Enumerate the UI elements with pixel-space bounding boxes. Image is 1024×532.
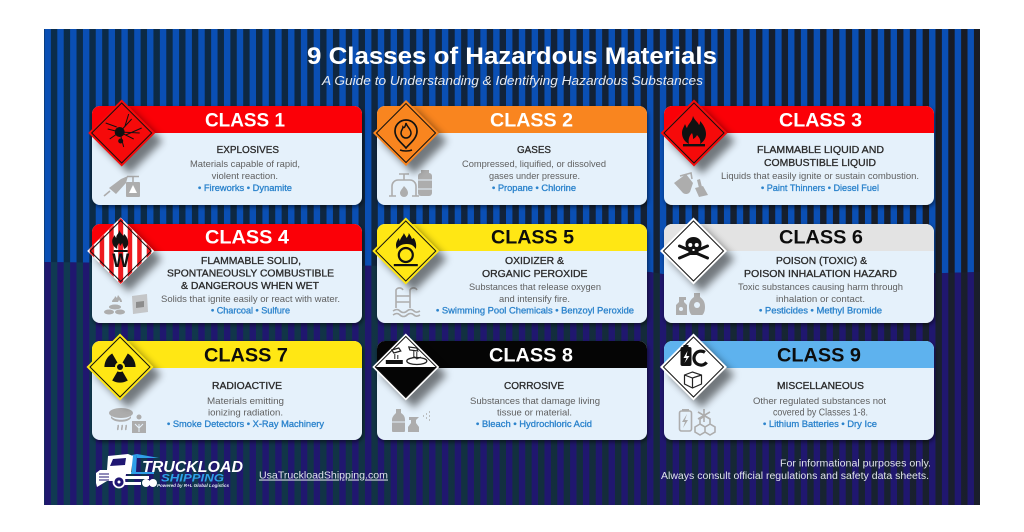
card body	[92, 341, 362, 440]
description: violent reaction.	[212, 170, 278, 181]
heading	[744, 256, 897, 280]
heading: GASES	[517, 145, 551, 156]
disclaimer	[661, 458, 931, 482]
icon: flammable solid placard: W	[112, 251, 129, 272]
icon: firework and dynamite	[104, 176, 140, 197]
description: Compressed, liquified, or dissolved	[462, 158, 606, 169]
card header	[377, 224, 647, 251]
title: 9 Classes of Hazardous Materials	[307, 43, 717, 70]
card header	[92, 224, 362, 251]
description	[190, 158, 300, 181]
examples: • Smoke Detectors • X-Ray Machinery	[167, 418, 324, 429]
description	[470, 395, 600, 418]
website link: UsaTruckloadShipping.com	[259, 470, 388, 482]
icon: flammable solid placard	[87, 217, 162, 292]
class label: CLASS 1	[205, 110, 285, 132]
icon: oxidizer placard	[372, 218, 447, 292]
icon: gas placard	[373, 100, 447, 174]
description	[462, 158, 606, 181]
description	[207, 395, 284, 418]
heading: & DANGEROUS WHEN WET	[181, 281, 319, 292]
examples: • Paint Thinners • Diesel Fuel	[761, 182, 879, 193]
examples: • Bleach • Hydrochloric Acid	[476, 418, 592, 429]
icon: pipe valve and cylinder	[389, 170, 432, 197]
class label: CLASS 7	[204, 344, 288, 366]
heading: RADIOACTIVE	[212, 381, 282, 392]
card header	[377, 106, 647, 133]
wordmark second line: SHIPPING	[161, 472, 225, 484]
heading	[167, 256, 334, 292]
icon: charcoal and sulfur bag	[104, 294, 148, 314]
examples: • Charcoal • Sulfure	[211, 304, 290, 316]
description	[469, 281, 601, 304]
heading: POISON (TOXIC) &	[776, 256, 867, 267]
class label: CLASS 9	[777, 344, 861, 366]
description: gases under pressure.	[489, 170, 580, 181]
panel: class 6	[660, 218, 934, 323]
subtitle: A Guide to Understanding & Identifying Hazardous Substances	[321, 74, 703, 88]
card header	[664, 224, 934, 251]
heading: POISON INHALATION HAZARD	[744, 269, 897, 280]
panel: class 9	[660, 334, 934, 440]
heading: FLAMMABLE LIQUID AND	[757, 145, 884, 156]
icon: pesticide bottles	[676, 293, 705, 315]
card header	[377, 341, 647, 368]
card header	[92, 341, 362, 368]
description: Toxic substances causing harm through	[738, 281, 903, 292]
examples: • Pesticides • Methyl Bromide	[759, 304, 882, 316]
description: Substances that damage living	[470, 395, 600, 406]
class label: CLASS 8	[489, 344, 573, 366]
examples: • Swimming Pool Chemicals • Benzoyl Peroxide	[436, 304, 634, 316]
heading: CORROSIVE	[504, 381, 564, 392]
description	[753, 395, 886, 418]
card body	[664, 341, 934, 440]
icon: poison placard	[660, 218, 734, 292]
card body	[377, 106, 647, 205]
heading: OXIDIZER &	[505, 256, 564, 267]
description: Substances that release oxygen	[469, 281, 601, 292]
icon: battery and dry ice	[680, 409, 715, 435]
icon: corrosive placard	[372, 334, 447, 408]
disclaimer: For informational purposes only.	[780, 458, 931, 470]
description: inhalation or contact.	[776, 293, 865, 304]
examples: • Fireworks • Dynamite	[198, 182, 292, 193]
logo: Truckload Shipping	[96, 454, 243, 488]
card body	[377, 224, 647, 323]
icon: smoke detector and x-ray	[109, 408, 146, 433]
heading: COMBUSTIBLE LIQUID	[764, 158, 876, 169]
description	[738, 281, 903, 304]
description: ionizing radiation.	[208, 406, 283, 418]
card body	[664, 106, 934, 205]
card header	[92, 106, 362, 133]
description: Other regulated substances not	[753, 395, 886, 406]
description: tissue or material.	[497, 406, 572, 418]
class label: CLASS 6	[779, 226, 863, 248]
panel: class 2	[373, 100, 647, 205]
icon: pool ladder	[393, 288, 420, 316]
wordmark: TRUCKLOAD	[142, 459, 243, 476]
card body	[92, 106, 362, 205]
card body	[92, 224, 362, 323]
examples: • Lithium Batteries • Dry Ice	[763, 418, 877, 429]
description: Solids that ignite easily or react with water.	[161, 293, 340, 304]
icon: miscellaneous placard	[660, 334, 734, 408]
examples: • Propane • Chlorine	[492, 182, 576, 193]
icon: radioactive placard	[86, 334, 161, 408]
heading: SPONTANEOUSLY COMBUSTIBLE	[167, 269, 334, 280]
panel: class 3	[660, 100, 934, 205]
card header	[664, 341, 934, 368]
heading	[757, 145, 884, 169]
icon: paint can and brush	[674, 173, 708, 197]
description: covered by Classes 1-8.	[773, 408, 868, 418]
heading: MISCELLANEOUS	[777, 381, 864, 392]
heading: EXPLOSIVES	[217, 145, 279, 156]
description: Materials emitting	[207, 395, 284, 406]
tagline: Powered by R+L Global Logistics	[157, 483, 229, 488]
icon: bleach and spray bottles	[392, 409, 430, 432]
panel: class 4	[87, 217, 362, 323]
description: and intensify fire.	[499, 293, 570, 304]
panel: class 1	[88, 100, 362, 205]
panel: class 7	[86, 334, 362, 440]
description: Materials capable of rapid,	[190, 158, 300, 169]
card header	[664, 106, 934, 133]
icon: truck	[96, 454, 159, 488]
card body	[664, 224, 934, 323]
description: Liquids that easily ignite or sustain combustion.	[721, 170, 919, 181]
panel: class 8	[372, 334, 647, 440]
class label: CLASS 4	[205, 226, 289, 248]
icon: explosive placard	[88, 100, 163, 174]
panel: class 5	[372, 218, 647, 323]
heading	[482, 256, 588, 280]
card body	[377, 341, 647, 440]
icon: flammable placard	[660, 100, 735, 174]
class label: CLASS 5	[491, 226, 574, 248]
class label: CLASS 3	[779, 110, 862, 132]
heading: ORGANIC PEROXIDE	[482, 269, 588, 280]
disclaimer: Always consult official regulations and safety data sheets.	[661, 471, 929, 482]
class label: CLASS 2	[490, 110, 573, 132]
heading: FLAMMABLE SOLID,	[201, 256, 301, 267]
